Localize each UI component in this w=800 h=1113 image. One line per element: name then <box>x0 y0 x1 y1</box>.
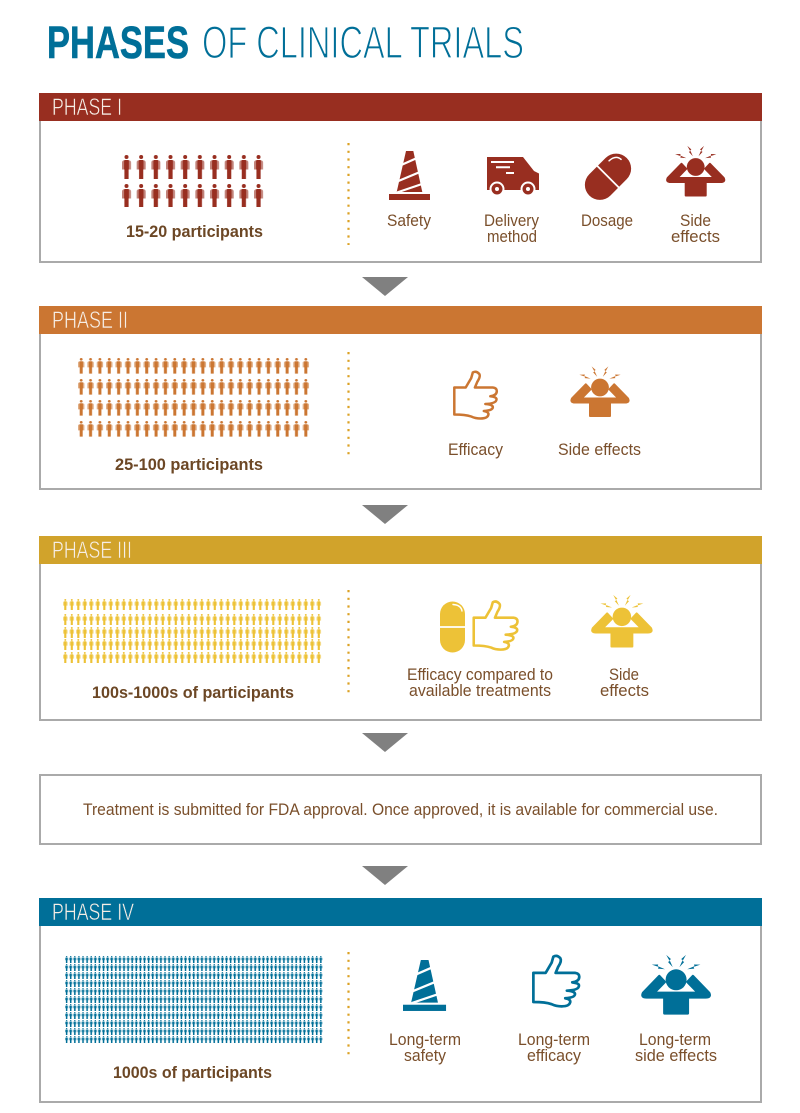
label: efficacy compared: Efficacy compared to <box>407 665 553 684</box>
label: delivery method <box>484 211 539 246</box>
panel: phase IV <box>39 898 762 1102</box>
phase III header <box>39 536 762 564</box>
icon: thumbs up <box>533 956 579 1006</box>
icon: delivery truck <box>487 157 539 196</box>
label: long-term side effects: side effects <box>635 1046 717 1065</box>
title: PHASES <box>47 17 189 68</box>
phase III header: PHASE III <box>52 537 132 564</box>
panel: phase I <box>39 93 762 262</box>
participants label: 15-20 participants <box>126 222 263 241</box>
label: side effects: effects <box>671 227 720 246</box>
phase I header: PHASE I <box>52 94 122 121</box>
people grid: 25-100 participants <box>78 358 310 437</box>
label: long-term side effects <box>635 1030 717 1065</box>
participants label: 25-100 participants <box>115 455 263 474</box>
icon: safety cone <box>389 151 430 200</box>
label: efficacy: Efficacy <box>448 440 503 459</box>
label: side effects <box>671 211 720 246</box>
icon: side effects <box>667 145 724 196</box>
label: long-term safety: safety <box>404 1046 446 1065</box>
icon: safety cone <box>403 960 446 1011</box>
arrow <box>362 866 408 885</box>
arrow <box>362 505 408 524</box>
label: side effects: effects <box>600 681 649 700</box>
arrow <box>362 277 408 296</box>
title: OF CLINICAL TRIALS <box>202 17 524 68</box>
icon: side effects <box>592 594 652 646</box>
people grid: 100s-1000s participants <box>63 599 322 663</box>
label: side effects <box>600 665 649 700</box>
label: long-term safety <box>389 1030 461 1065</box>
label: efficacy compared <box>407 665 553 700</box>
label: safety: Safety <box>387 211 431 230</box>
phase II header: PHASE II <box>52 307 128 334</box>
phase IV header: PHASE IV <box>52 899 134 926</box>
label: long-term safety: Long-term <box>389 1030 461 1049</box>
panel: FDA approval note: Treatment is submitted for FDA approval. Once approved, it is available for commercial use. <box>83 800 718 819</box>
phase IV header <box>39 898 762 926</box>
icon: thumbs up <box>454 372 497 418</box>
phase I header <box>39 93 762 121</box>
participants label: 1000s of participants <box>113 1063 272 1082</box>
participants label: 100s-1000s of participants <box>92 683 294 702</box>
icon: pill <box>578 147 638 207</box>
label: side effects: Side <box>680 211 711 230</box>
arrow <box>362 733 408 752</box>
label: side effects: Side effects <box>558 440 641 459</box>
label: long-term efficacy: Long-term <box>518 1030 590 1049</box>
people grid: 1000s participants <box>65 956 323 1044</box>
label: long-term side effects: Long-term <box>639 1030 711 1049</box>
label: long-term efficacy: efficacy <box>527 1046 581 1065</box>
title <box>47 17 524 68</box>
people grid: 15-20 participants <box>122 155 264 207</box>
icon: side effects <box>571 366 629 416</box>
panel: phase III <box>39 536 762 720</box>
icon: thumbs up <box>474 602 518 650</box>
label: delivery method: Delivery <box>484 211 539 230</box>
label: side effects: Side <box>609 665 639 684</box>
label: delivery method: method <box>487 227 537 246</box>
label: efficacy compared: available treatments <box>409 681 551 700</box>
icon: pill <box>439 602 466 652</box>
icon: side effects <box>642 954 710 1013</box>
panel: phase II <box>39 306 762 489</box>
label: long-term efficacy <box>518 1030 590 1065</box>
phase II header <box>39 306 762 334</box>
label: dosage: Dosage <box>581 211 633 230</box>
panel: FDA approval note <box>40 775 761 844</box>
